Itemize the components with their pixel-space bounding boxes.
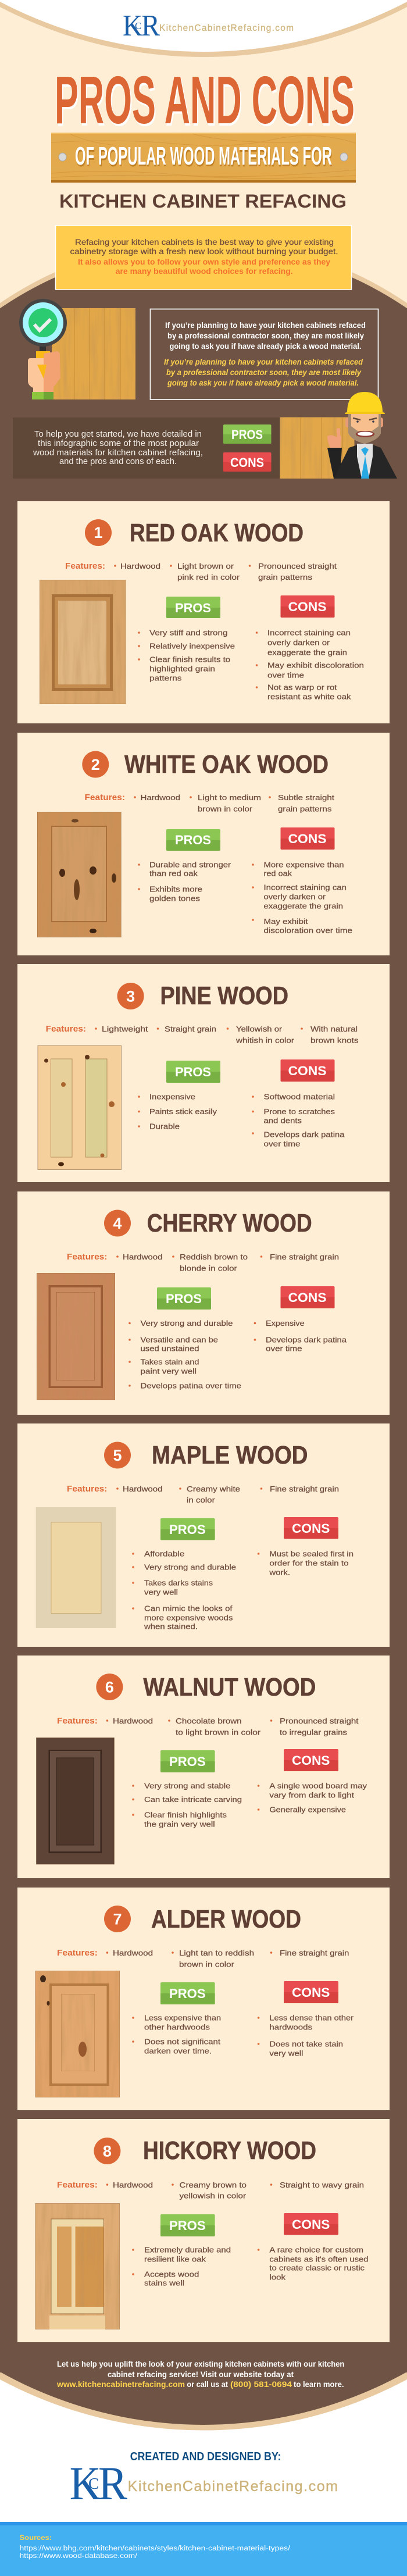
cons list [258, 2246, 369, 2282]
pros list [132, 1782, 242, 1828]
framed text box: going to ask you if have already pick a wood material. [170, 341, 362, 351]
cons list: exaggerate the grain [264, 901, 343, 911]
pros list: Takes stain and [141, 1357, 199, 1367]
features: Light brown or [177, 562, 234, 570]
pros list: than red oak [149, 869, 198, 878]
features [57, 1949, 349, 1969]
cabinet door photo [36, 1507, 116, 1628]
banner text: and the pros and cons of each. [59, 457, 177, 466]
pros list: Inexpensive [149, 1092, 195, 1101]
pros button: PROS [166, 1291, 202, 1306]
cons list: cabinets as it's often used [269, 2255, 369, 2263]
number badge 1 [85, 519, 112, 546]
cons list: Does not take stain [269, 2040, 343, 2048]
cons button [284, 1981, 338, 2003]
wood panel with magnifier [19, 299, 135, 399]
features: yellowish in color [179, 2191, 247, 2200]
number badge 8 [94, 2138, 120, 2164]
pros list: Very strong and stable [144, 1782, 230, 1790]
sources footer: https://www.bhg.com/kitchen/cabinets/styles/kitchen-cabinet-material-types/ [20, 2545, 291, 2552]
heading: HICKORY WOOD [143, 2136, 316, 2165]
pros list [128, 1319, 241, 1390]
cons list: over time [266, 1344, 302, 1353]
cons list [258, 1549, 354, 1577]
panel: 6 walnut wood [17, 1656, 390, 1878]
features: Fine straight grain [270, 1253, 339, 1261]
framed text box: by a professional contractor soon, they are most likely [166, 368, 362, 377]
pros list: Can take intricate carving [144, 1795, 242, 1804]
cons list: Develops dark patina [264, 1130, 345, 1139]
features [67, 1485, 339, 1504]
pros list: Less expensive than [144, 2013, 221, 2022]
wood plank banner [51, 133, 356, 183]
logo: KCR bottom: R [98, 2457, 127, 2510]
pros list: Does not significant [144, 2038, 220, 2046]
features: brown in color [179, 1960, 234, 1969]
features: Pronounced straight [280, 1717, 359, 1725]
pros list: patterns [149, 673, 182, 683]
number badge 7: 7 [113, 1911, 122, 1928]
cons list: work. [269, 1568, 290, 1577]
features: Features: [65, 562, 105, 571]
cons list: Prone to scratches [264, 1107, 335, 1116]
features: Subtle straight [278, 793, 334, 802]
panel: 4 cherry wood [17, 1191, 390, 1415]
pros list: Takes darks stains [144, 1578, 213, 1587]
cabinet door photo [38, 1046, 121, 1170]
number badge 4: 4 [113, 1215, 122, 1232]
features: Creamy brown to [179, 2181, 247, 2189]
pros button: PROS [169, 1522, 206, 1537]
features: Hardwood [113, 1949, 153, 1957]
cons list: A single wood board may [269, 1782, 367, 1790]
cons list: Must be sealed first in [269, 1549, 354, 1558]
number badge 5 [104, 1442, 131, 1469]
pros list: Very stiff and strong [149, 628, 228, 637]
footer white area [0, 2379, 407, 2522]
pros button: PROS [169, 1986, 206, 2001]
features: Features: [67, 1253, 107, 1262]
features: blonde in color [180, 1264, 237, 1272]
features: Light to medium [198, 793, 261, 802]
pros list [138, 861, 231, 902]
pros list [132, 1549, 236, 1630]
logo: KCR bottom: KitchenCabinetRefacing.com [128, 2478, 338, 2495]
cons list: very well [269, 2049, 304, 2057]
heading: CHERRY WOOD [147, 1209, 312, 1237]
contractor illustration [327, 392, 397, 479]
features: Hardwood [141, 793, 180, 802]
cons list: overly darken or [264, 892, 326, 901]
logo: KCR bottom: C [88, 2475, 99, 2492]
cons list [256, 628, 364, 701]
cons button legend [223, 452, 271, 472]
logo: KCR top: K [123, 9, 142, 42]
cons list: look [269, 2272, 286, 2282]
cabinet door photo [35, 1971, 120, 2097]
cons list: overly darken or [267, 638, 330, 647]
call to action [56, 2359, 344, 2389]
number badge 6: 6 [105, 1678, 114, 1696]
cons button: CONS [288, 1064, 327, 1078]
features: Reddish brown to [180, 1253, 248, 1261]
banner text: this infographic some of the most popular [38, 439, 199, 448]
heading: WHITE OAK WOOD [124, 750, 329, 779]
cons list: A rare choice for custom [269, 2246, 363, 2254]
features: to light brown in color [176, 1728, 261, 1736]
features: Hardwood [113, 2181, 153, 2189]
pros button [166, 829, 220, 851]
cons button [280, 595, 335, 618]
heading: WALNUT WOOD [143, 1673, 316, 1701]
intro yellow box: cabinetry storage with a fresh new look without burning your budget. [70, 247, 338, 256]
pros list: more expensive woods [144, 1613, 233, 1622]
cons button: CONS [292, 1753, 330, 1768]
intro yellow box: are many beautiful wood choices for refacing. [116, 266, 293, 276]
cons button: CONS [292, 1521, 330, 1536]
cons button [284, 1517, 338, 1539]
cons list [258, 2013, 354, 2057]
framed text box: If you’re planning to have your kitchen cabinets refaced [165, 320, 366, 330]
pros button: PROS [175, 601, 211, 615]
pros list: Accepts wood [144, 2270, 199, 2278]
pros list: golden tones [149, 894, 201, 902]
cons button legend: CONS [230, 455, 264, 470]
pros button: PROS [169, 1754, 206, 1769]
logo: KCR bottom: K [70, 2457, 101, 2510]
number badge 3 [117, 983, 144, 1009]
number badge 1: 1 [94, 524, 103, 541]
cons button: CONS [288, 1290, 327, 1305]
pros button [160, 1750, 215, 1772]
wood panel behind contractor [280, 418, 355, 479]
cons button [280, 1059, 335, 1082]
cons button [280, 1286, 335, 1308]
cons list: and dents [264, 1116, 302, 1125]
banner text: wood materials for kitchen cabinet refacing, [33, 448, 203, 458]
cons list: vary from dark to light [269, 1791, 354, 1799]
features: in color [187, 1496, 215, 1504]
cons button: CONS [288, 600, 327, 614]
logo: KCR bottom [70, 2457, 338, 2510]
pros list: paint very well [141, 1367, 197, 1376]
icon: magnifier with check [19, 299, 67, 399]
cons button: CONS [292, 2217, 330, 2232]
cons list: Less dense than other [269, 2013, 354, 2022]
features [57, 1717, 359, 1736]
pros list: Clear finish highlights [144, 1811, 227, 1819]
intro yellow box [56, 226, 351, 290]
pros button [160, 1982, 215, 2004]
pros list [138, 628, 235, 683]
credit heading: CREATED AND DESIGNED BY: [130, 2450, 281, 2463]
banner text: To help you get started, we have detailed in [34, 430, 202, 439]
features: Yellowish or [236, 1025, 283, 1033]
cons list: discoloration over time [264, 926, 352, 935]
features: Creamy white [187, 1485, 240, 1493]
features: Hardwood [123, 1253, 163, 1261]
number badge 3: 3 [126, 987, 135, 1005]
pros list [138, 1092, 217, 1130]
logo: KCR top: C [135, 20, 141, 31]
features [67, 1253, 339, 1272]
pros list: Can mimic the looks of [144, 1604, 233, 1613]
number badge 2 [82, 751, 109, 778]
heading: RED OAK WOOD [130, 519, 304, 547]
features: Features: [57, 2181, 98, 2190]
cons list [254, 1319, 347, 1353]
cons list: resistant as white oak [267, 692, 351, 701]
cons list: Incorrect staining can [264, 883, 347, 892]
number badge 7 [104, 1906, 131, 1932]
features: Hardwood [113, 1717, 153, 1725]
features: Lightweight [102, 1025, 148, 1033]
cons list: over time [267, 671, 304, 679]
features [57, 2181, 364, 2200]
pros button: PROS [169, 2218, 206, 2233]
pros button [166, 597, 220, 618]
features: Features: [85, 793, 125, 802]
cons list: More expensive than [264, 861, 344, 869]
cons list [252, 861, 352, 935]
cons button [280, 827, 335, 850]
features: Hardwood [123, 1485, 163, 1493]
pros list: when stained. [144, 1622, 198, 1630]
panel: 7 alder wood [17, 1888, 390, 2110]
features: Straight to wavy grain [280, 2181, 364, 2189]
cons list: red oak [264, 869, 292, 878]
intro yellow box: Refacing your kitchen cabinets is the best way to give your existing [75, 237, 334, 247]
pros list: very well [144, 1587, 178, 1597]
pros list [132, 2246, 231, 2288]
panel: 8 hickory wood [17, 2119, 390, 2342]
panel: 5 maple wood [17, 1423, 390, 1647]
pros list: stains well [144, 2278, 184, 2288]
number badge 4 [104, 1209, 131, 1236]
call to action: to learn more. [294, 2379, 344, 2389]
pros list: Affordable [144, 1549, 184, 1558]
cabinet door photo [36, 1737, 114, 1864]
cons button: CONS [288, 832, 327, 846]
cons list: Not as warp or rot [267, 683, 337, 692]
features: whitish in color [235, 1036, 295, 1044]
cons button [284, 2213, 338, 2235]
features: With natural [310, 1025, 358, 1033]
framed text box: by a professional contractor soon, they are most likely [167, 331, 364, 340]
pros button legend: PROS [231, 427, 263, 442]
pros list: Develops patina over time [141, 1382, 241, 1390]
features: Features: [57, 1717, 98, 1726]
call to action: (800) 581-0694 [230, 2379, 292, 2389]
pros list: highlighted grain [149, 664, 215, 673]
cabinet door photo [37, 1273, 115, 1400]
call to action: www.kitchencabinetrefacing.com [56, 2379, 185, 2389]
features: to irregular grains [280, 1728, 348, 1736]
features [65, 562, 337, 581]
pros list: Relatively inexpensive [149, 642, 235, 650]
pros list: other hardwoods [144, 2022, 210, 2032]
pros button: PROS [175, 1065, 211, 1079]
features [85, 793, 334, 813]
cabinet door photo [35, 2203, 120, 2329]
pros list: Very strong and durable [144, 1563, 236, 1571]
subtitle: KITCHEN CABINET REFACING [59, 191, 347, 212]
panel: 1 red oak wood [17, 501, 390, 723]
heading: ALDER WOOD [151, 1905, 301, 1933]
logo: KCR top: R [141, 9, 160, 42]
cons button [284, 1749, 338, 1771]
heading: PINE WOOD [160, 982, 288, 1010]
sources footer: Sources: [20, 2534, 52, 2542]
cabinet door photo [40, 580, 126, 704]
call to action: Let us help you uplift the look of your existing kitchen cabinets with our kitchen [57, 2359, 344, 2368]
features: Hardwood [120, 562, 160, 570]
features: Features: [57, 1949, 98, 1958]
pros button [160, 1518, 215, 1540]
pros list: the grain very well [144, 1820, 215, 1828]
pros button [160, 2214, 215, 2236]
cons list: Generally expensive [269, 1805, 346, 1814]
features: grain patterns [258, 573, 313, 581]
cons list: Softwood material [264, 1092, 335, 1101]
call to action: cabinet refacing service! Visit our website today at [108, 2370, 294, 2379]
intro yellow box: It also allows you to follow your own style and preference as they [78, 257, 330, 266]
pros button: PROS [175, 833, 211, 847]
features [46, 1025, 359, 1044]
features: Chocolate brown [176, 1717, 242, 1725]
rivet right [340, 153, 348, 161]
header arc with logo [0, 0, 407, 57]
cons list: May exhibit [264, 917, 308, 926]
logo: KCR top: KitchenCabinetRefacing.com [159, 23, 294, 33]
cabinet door photo [37, 812, 121, 937]
heading: MAPLE WOOD [152, 1441, 308, 1469]
cons list: May exhibit discoloration [267, 661, 364, 670]
cons list [258, 1782, 367, 1814]
pros list [132, 2013, 221, 2055]
framed text box: going to ask you if have already pick a wood material. [167, 378, 359, 387]
pros list: Extremely durable and [144, 2246, 231, 2254]
cons list: Expensive [266, 1319, 305, 1328]
pros list: Clear finish results to [149, 655, 230, 664]
pros list: darken over time. [144, 2047, 212, 2055]
cons list: over time [264, 1140, 300, 1148]
sources footer: https://www.wood-database.com/ [20, 2553, 138, 2560]
pros list: used unstained [141, 1344, 199, 1353]
features: brown in color [198, 805, 253, 813]
pros list: Paints stick easily [149, 1107, 217, 1116]
features: grain patterns [278, 805, 332, 813]
pros list: Exhibits more [149, 885, 202, 893]
cons list: exaggerate the grain [267, 648, 347, 657]
cons list: to create classic or rustic [269, 2263, 365, 2272]
sources footer [0, 2522, 407, 2576]
logo: KCR top [123, 9, 294, 42]
pros list: Durable and stronger [149, 861, 231, 869]
call to action: or call us at [187, 2379, 228, 2389]
features: Pronounced straight [258, 562, 337, 570]
cons list: Incorrect staining can [267, 628, 351, 637]
cons list: Develops dark patina [266, 1335, 347, 1344]
pros button [157, 1287, 211, 1310]
features: Straight grain [165, 1025, 216, 1033]
features: Light tan to reddish [179, 1949, 254, 1957]
number badge 2: 2 [91, 756, 100, 773]
panel: 2 white oak wood [17, 733, 390, 955]
pros list: Durable [149, 1122, 180, 1130]
panel: 3 pine wood [17, 964, 390, 1182]
rivet left [59, 153, 66, 161]
framed text box: If you’re planning to have your kitchen cabinets refaced [164, 357, 363, 366]
number badge 6 [96, 1674, 123, 1700]
pros list: Very strong and durable [141, 1319, 233, 1328]
features: Features: [46, 1025, 86, 1034]
features: Fine straight grain [270, 1485, 339, 1493]
features: brown knots [310, 1036, 359, 1044]
cons button: CONS [292, 1985, 330, 2000]
features: Features: [67, 1485, 107, 1494]
cons list [252, 1092, 345, 1148]
cons list: order for the stain to [269, 1558, 349, 1568]
banner text [33, 430, 203, 466]
features: pink red in color [177, 573, 240, 581]
framed text box [150, 309, 378, 399]
number badge 5: 5 [113, 1447, 122, 1464]
pros list: resilient like oak [144, 2255, 206, 2263]
pros list: Versatile and can be [141, 1335, 218, 1344]
features: Fine straight grain [280, 1949, 349, 1957]
pros button legend [223, 424, 271, 444]
started banner [13, 418, 280, 479]
number badge 8: 8 [103, 2142, 112, 2160]
pros button [166, 1061, 220, 1083]
cons list: hardwoods [269, 2022, 313, 2032]
